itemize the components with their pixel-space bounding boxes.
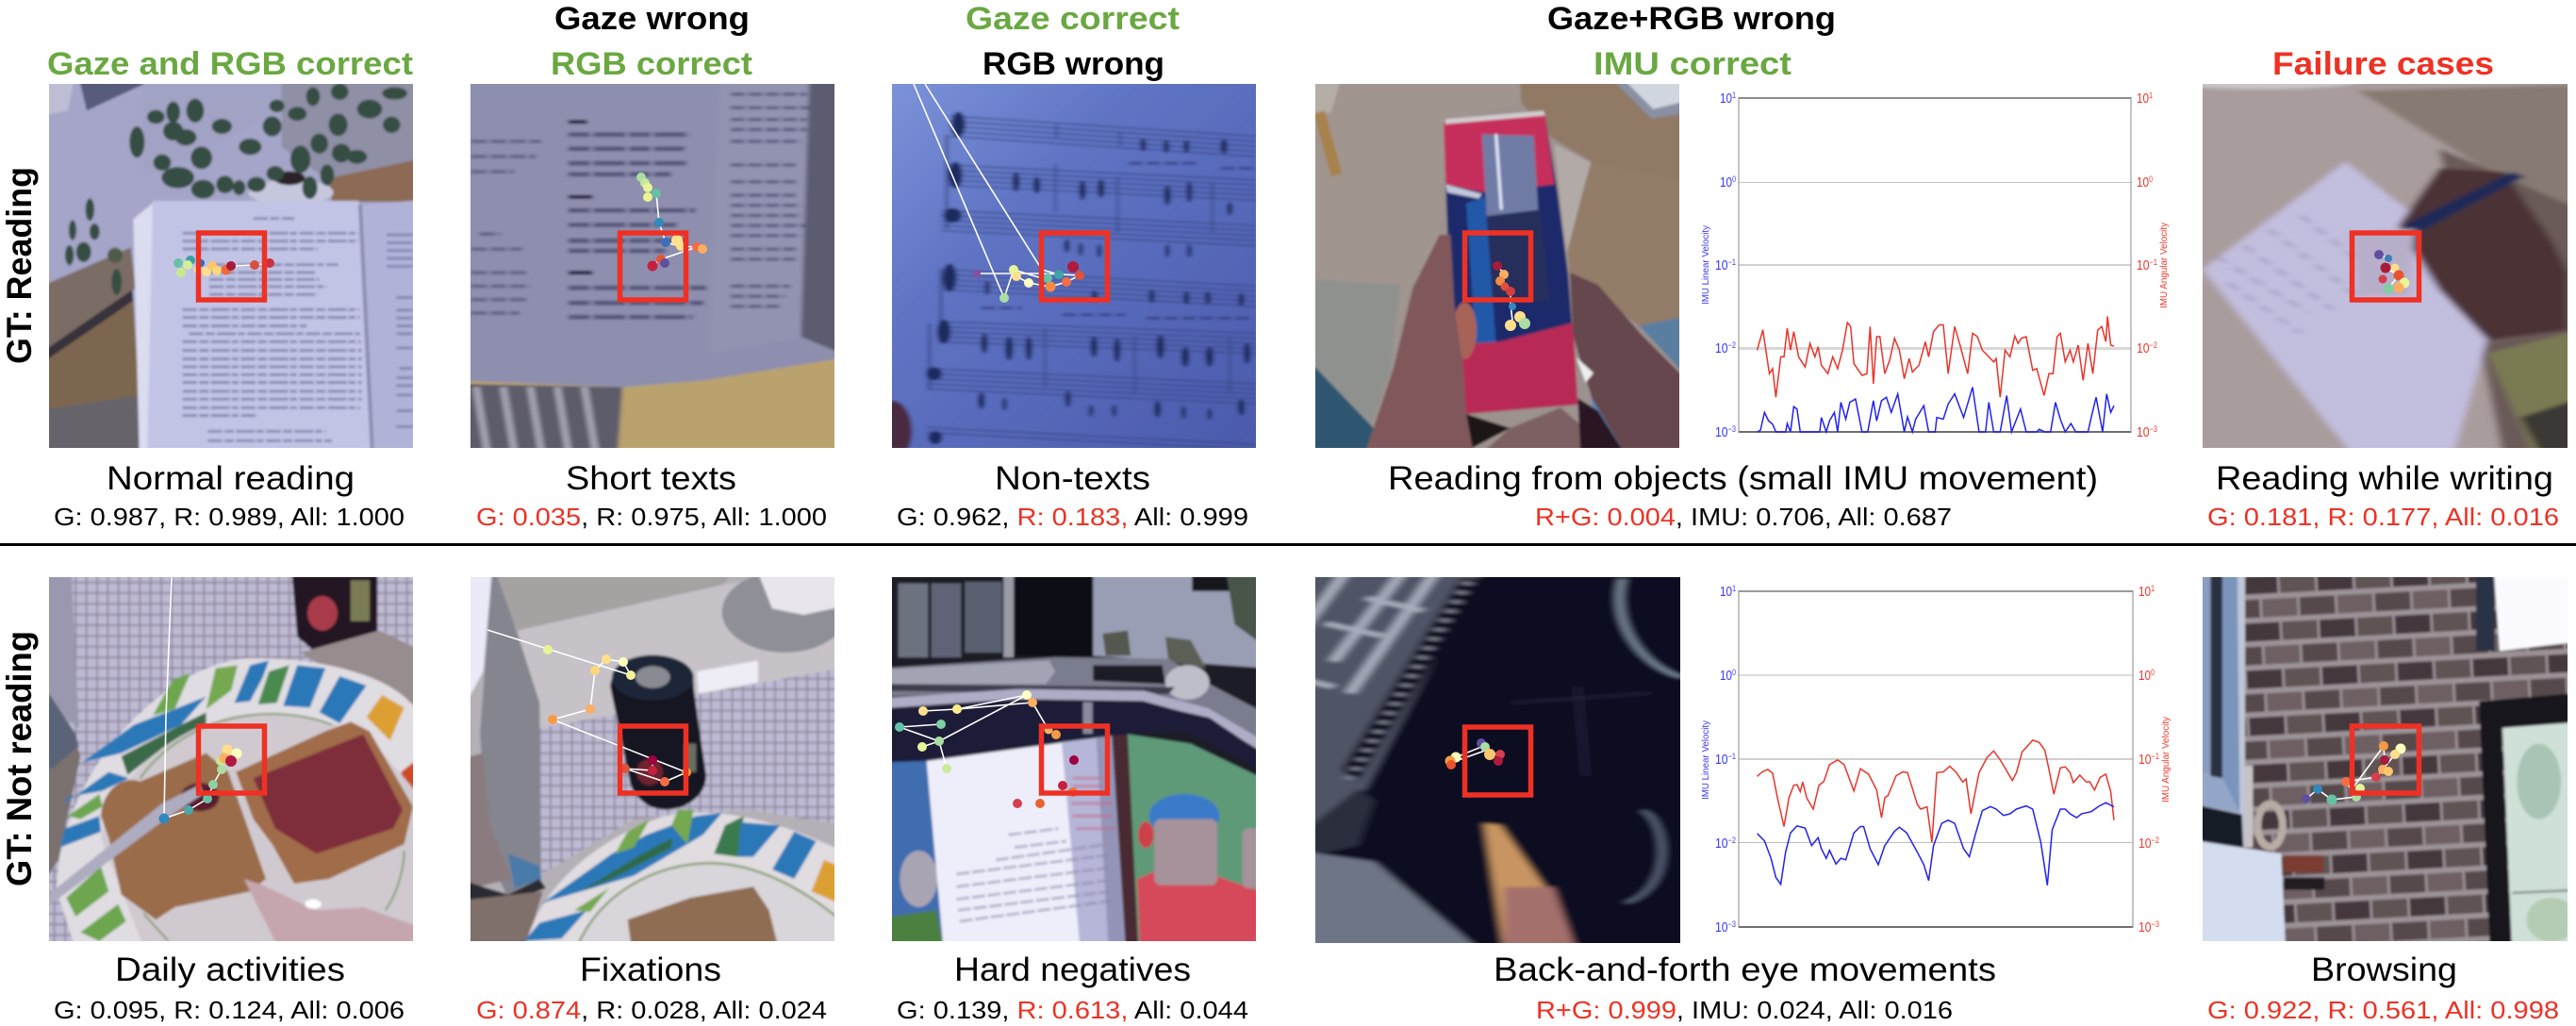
panel: non-texts: [892, 84, 1256, 528]
panel: hard negatives: [880, 565, 1269, 1024]
heading: gaze plus RGB wrong IMU correct: IMU correct: [1593, 46, 1792, 82]
heading: gaze plus RGB wrong IMU correct: Gaze+RGB wrong: [1547, 1, 1836, 37]
right axis ticks: 10: [2137, 424, 2153, 440]
heading: failure cases: Failure cases: [2272, 46, 2494, 82]
scores: G: 0.922, R: 0.561, All: 0.998: [2207, 996, 2559, 1024]
right axis ticks: −2: [2152, 836, 2159, 845]
panel: back-and-forth eye movements: [1285, 566, 2171, 1024]
right axis title: IMU Angular Velocity: [2159, 223, 2170, 308]
right axis ticks: 10: [2137, 340, 2153, 356]
left axis ticks: 10: [1720, 174, 1736, 190]
photo: jam jar on table: [471, 577, 834, 941]
prediction box: [1041, 233, 1107, 300]
scores: G: 0.035 , R: 0.975, All: 1.000: [476, 503, 827, 531]
right axis ticks: 10: [2138, 668, 2155, 684]
caption: Short texts: [566, 460, 736, 497]
scores: G: 0.874 , R: 0.028, All: 0.024: [476, 996, 827, 1024]
photo: sheet music: [892, 84, 1256, 448]
blue line: linear velocity: [1758, 388, 2114, 432]
right axis ticks: [2138, 584, 2159, 935]
caption: Reading from objects (small IMU movement): [1388, 460, 2098, 497]
right axis ticks: 1: [2149, 91, 2153, 100]
right axis ticks: −1: [2150, 257, 2157, 267]
photo: book in front of car: [892, 577, 1256, 941]
photo: brick wall and window: [2203, 577, 2568, 941]
gaze trail: [487, 630, 691, 786]
left axis ticks: 1: [1732, 584, 1736, 593]
right axis ticks: 0: [2151, 668, 2155, 677]
left axis ticks: 10: [1715, 752, 1731, 768]
panel: reading while writing: [2203, 84, 2568, 528]
caption: Back-and-forth eye movements: [1494, 952, 1996, 988]
heading: gaze and RGB correct: Gaze and RGB correct: [47, 46, 413, 82]
photo: plate with toast: [49, 577, 413, 941]
caption: Daily activities: [115, 952, 345, 988]
left axis ticks: 10: [1715, 919, 1731, 935]
heading: gaze correct RGB wrong: Gaze correct: [966, 1, 1180, 37]
prediction box: [620, 233, 686, 300]
right axis ticks: 10: [2137, 257, 2153, 273]
label: GT Not reading row: GT: Not reading: [0, 631, 39, 886]
right axis ticks: 1: [2151, 584, 2155, 593]
caption: Non-texts: [995, 460, 1150, 497]
panel: browsing: [2190, 565, 2576, 1024]
right axis ticks: −2: [2150, 340, 2157, 350]
scores: R+G: 0.004 , IMU: 0.706, All: 0.687: [1535, 503, 1952, 531]
right axis ticks: −3: [2152, 919, 2159, 929]
divider between rows: [0, 543, 2576, 546]
left axis ticks: −2: [1728, 340, 1736, 350]
right axis ticks: 10: [2138, 752, 2155, 768]
prediction box: [620, 726, 686, 793]
left axis ticks: 1: [1732, 91, 1736, 100]
right axis ticks: [2137, 91, 2157, 440]
left axis ticks: [1715, 584, 1736, 935]
left axis ticks: [1715, 91, 1736, 440]
panel: short texts: [471, 84, 834, 528]
gaze trail: [1493, 261, 1530, 331]
left axis title: IMU Linear Velocity: [1701, 720, 1711, 800]
label: GT Reading row: GT: Reading: [0, 167, 39, 364]
right axis ticks: 10: [2138, 919, 2155, 935]
heading: gaze plus RGB wrong IMU correct: [1547, 1, 1836, 82]
heading: gaze wrong RGB correct: Gaze wrong: [554, 1, 750, 37]
scores: G: 0.181, R: 0.177, All: 0.016: [2207, 503, 2559, 531]
heading: gaze correct RGB wrong: [966, 1, 1180, 82]
caption: Reading while writing: [2216, 460, 2553, 497]
left axis ticks: 10: [1715, 836, 1731, 852]
right axis ticks: 0: [2149, 174, 2153, 184]
prediction box: [198, 233, 264, 300]
prediction box: [1465, 233, 1531, 300]
scores: G: 0.962, R: 0.183, All: 0.999: [897, 503, 1248, 531]
chart: IMU velocities, reading from objects: [1701, 91, 2170, 440]
heading: gaze wrong RGB correct: [551, 1, 752, 82]
left axis ticks: 10: [1715, 340, 1731, 356]
left axis ticks: −3: [1728, 919, 1736, 929]
right axis ticks: −3: [2150, 424, 2157, 434]
left axis ticks: 0: [1732, 174, 1736, 184]
caption: Fixations: [580, 952, 721, 988]
gaze trail: [173, 256, 274, 277]
panel: normal reading: [37, 72, 426, 531]
gaze trail: [895, 690, 1079, 808]
left axis ticks: 10: [1715, 424, 1731, 440]
chart: IMU velocities, back-and-forth: [1701, 584, 2171, 935]
left axis ticks: −2: [1728, 836, 1736, 845]
blue line: linear velocity: [1758, 803, 2114, 885]
right axis ticks: 10: [2137, 174, 2153, 190]
photo: soda can in hands: [1315, 84, 1679, 448]
right axis ticks: 10: [2137, 91, 2153, 107]
right axis ticks: 10: [2138, 836, 2155, 852]
gaze trail: [636, 173, 707, 272]
panel: daily activities: [37, 565, 426, 1024]
heading: gaze correct RGB wrong: RGB wrong: [983, 46, 1164, 82]
left axis ticks: 10: [1715, 257, 1731, 273]
gaze trail: [2303, 741, 2406, 805]
right axis ticks: 10: [2138, 584, 2155, 600]
prediction box: [2352, 726, 2419, 793]
gaze trail: [914, 84, 1084, 303]
caption: Hard negatives: [954, 952, 1191, 988]
heading: gaze wrong RGB correct: RGB correct: [551, 46, 752, 82]
left axis ticks: 0: [1732, 668, 1736, 677]
prediction box: [2352, 233, 2419, 300]
left axis ticks: 10: [1720, 668, 1736, 684]
photo: dark night scene: [1315, 577, 1680, 943]
left axis ticks: 10: [1720, 584, 1736, 600]
left axis ticks: 10: [1720, 91, 1736, 107]
scores: G: 0.139, R: 0.613, All: 0.044: [897, 996, 1248, 1024]
panel: fixations: [458, 565, 848, 1024]
panel: reading from objects: [1303, 72, 2170, 531]
caption: Browsing: [2311, 952, 2457, 988]
gaze trail: [1445, 738, 1505, 770]
left axis ticks: −3: [1728, 424, 1736, 434]
scores: G: 0.095, R: 0.124, All: 0.006: [54, 996, 405, 1024]
gaze trail: [158, 577, 241, 824]
right axis ticks: −1: [2152, 752, 2159, 761]
right axis title: IMU Angular Velocity: [2161, 717, 2171, 803]
red line: angular velocity: [1758, 740, 2114, 842]
left axis ticks: −1: [1728, 752, 1736, 761]
scores: G: 0.987, R: 0.989, All: 1.000: [54, 503, 405, 531]
gaze trail: [2374, 250, 2410, 294]
left axis ticks: −1: [1728, 257, 1736, 267]
prediction box: [1041, 726, 1107, 793]
photo: open book and plant: [49, 84, 413, 448]
prediction box: [198, 726, 264, 793]
caption: Normal reading: [107, 460, 355, 497]
left axis title: IMU Linear Velocity: [1701, 225, 1711, 305]
prediction box: [1465, 727, 1531, 795]
red line: angular velocity: [1758, 317, 2114, 397]
scores: R+G: 0.999 , IMU: 0.024, All: 0.016: [1536, 996, 1953, 1024]
photo: hand writing on paper: [2203, 84, 2568, 448]
photo: magazine page: [471, 84, 834, 448]
